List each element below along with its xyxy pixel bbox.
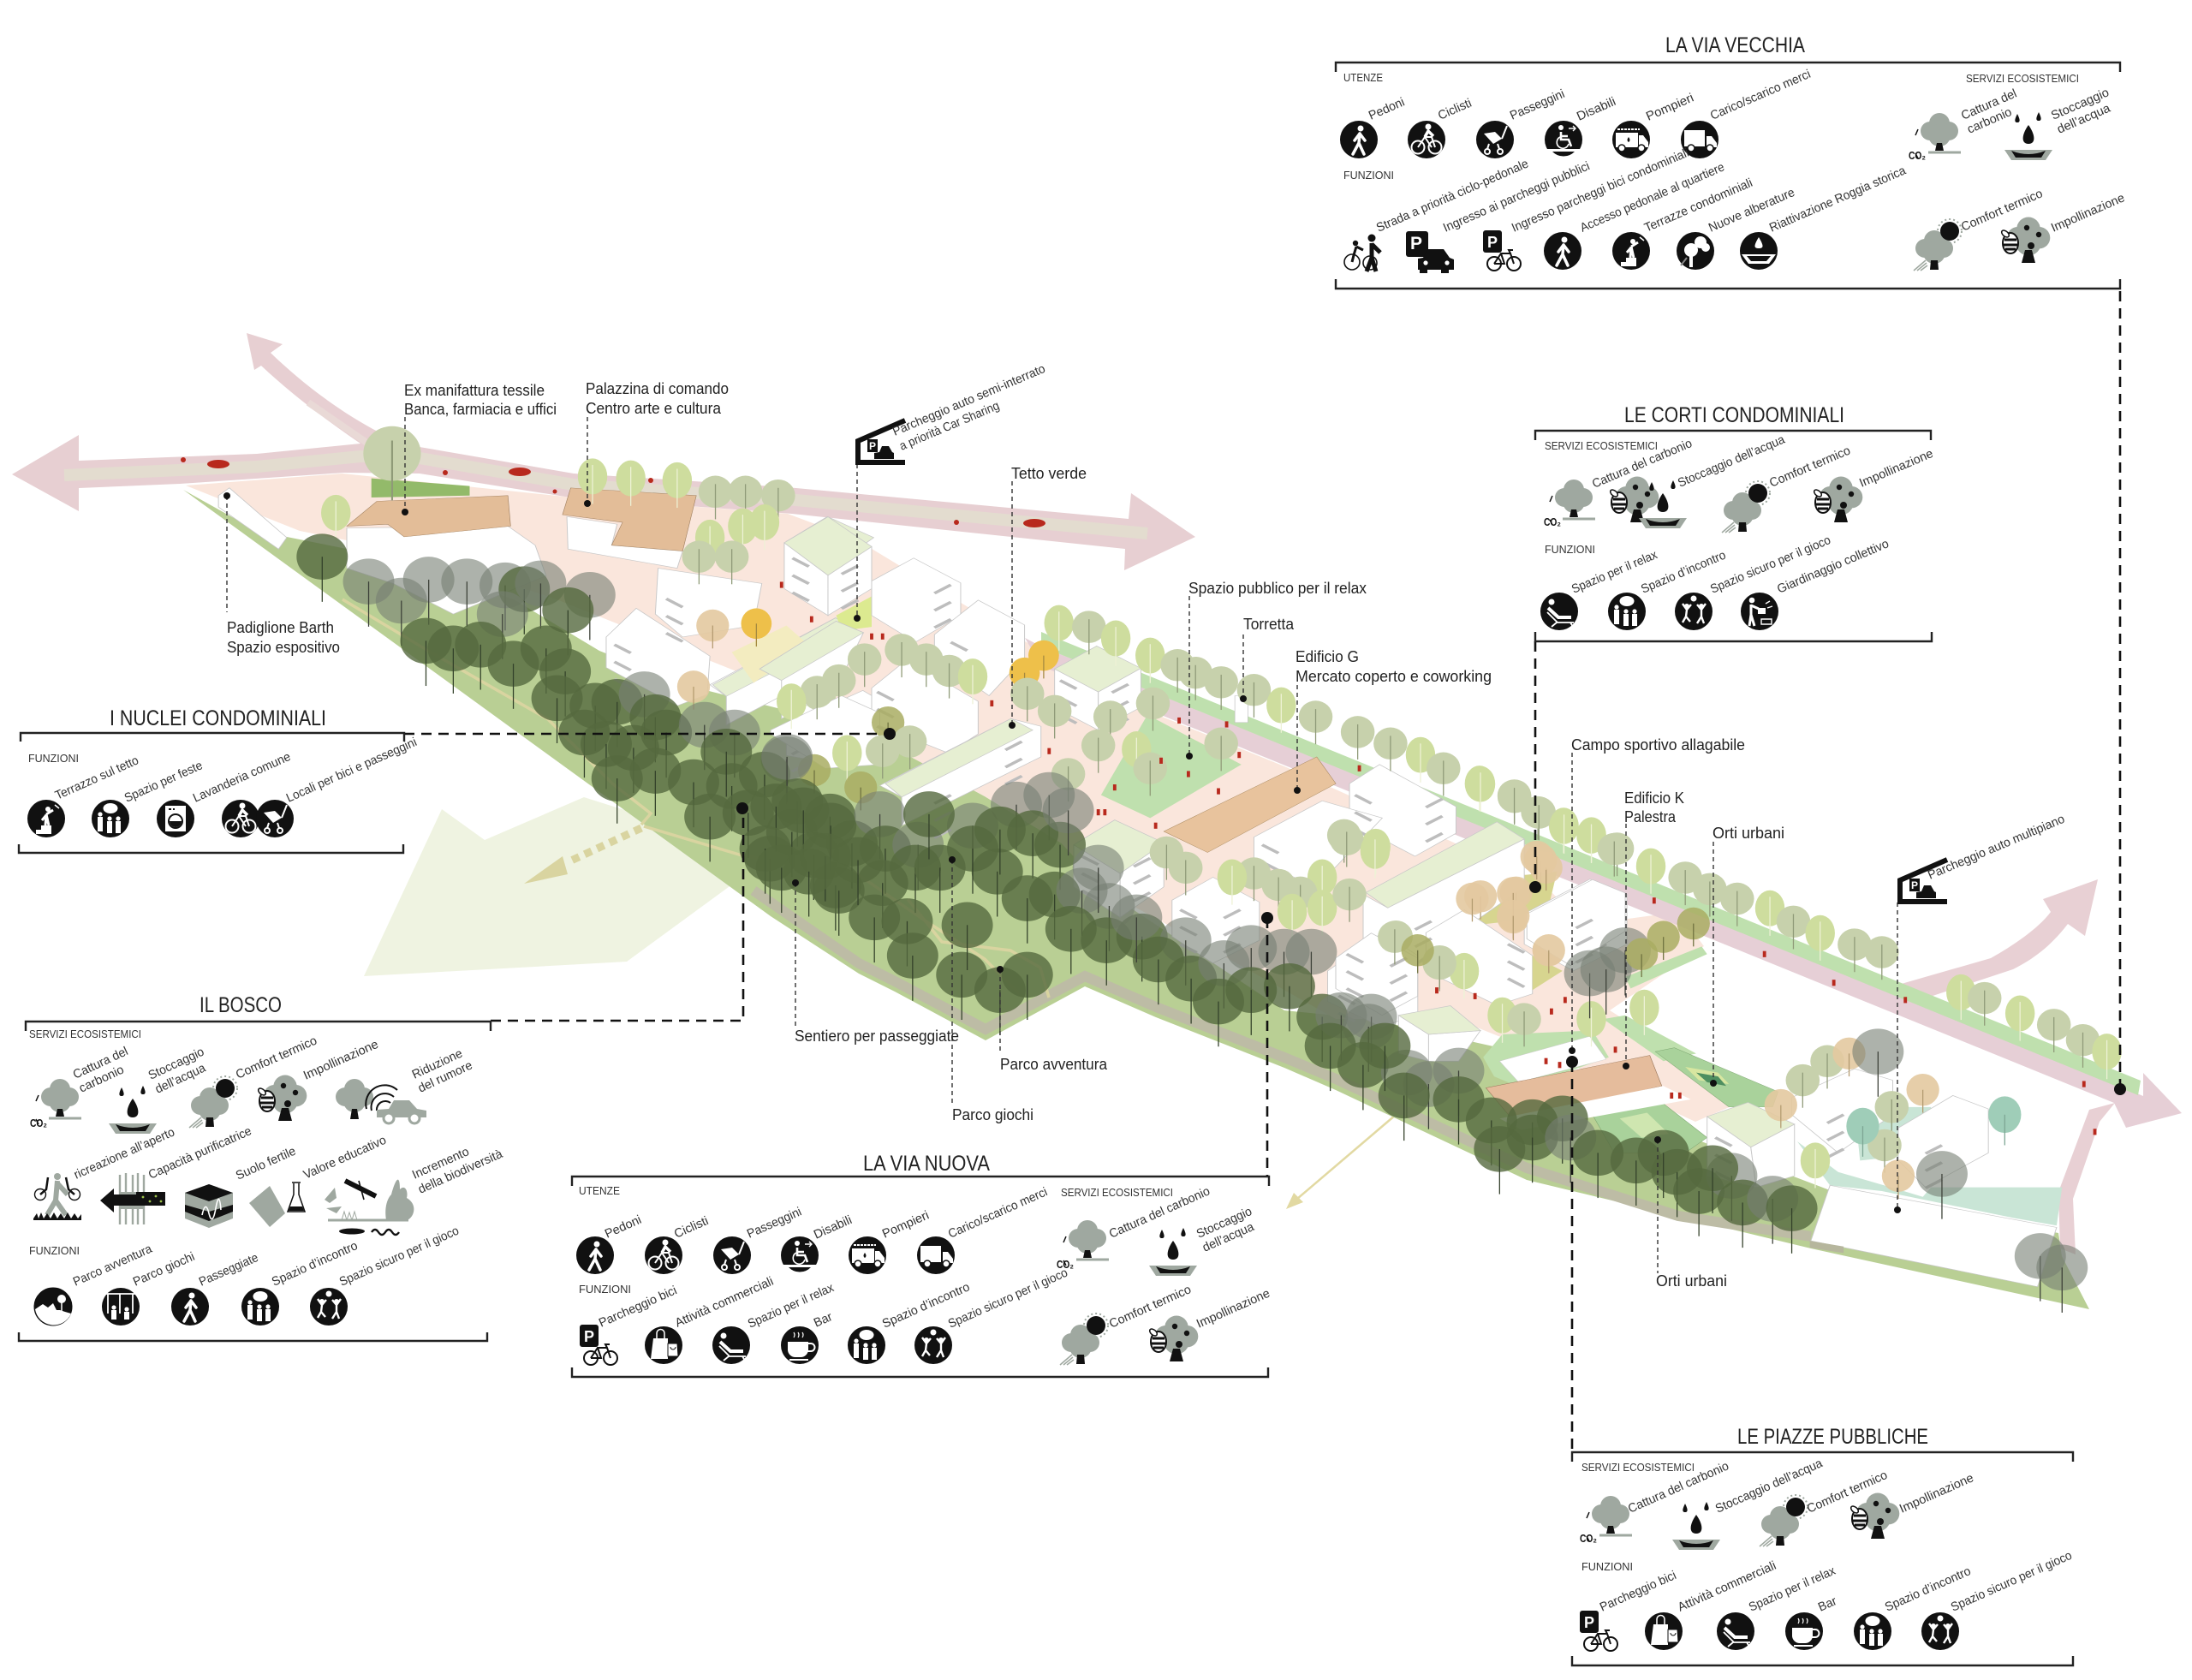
section labels <box>1343 71 2079 182</box>
icon: Attività commerciali <box>645 1275 776 1364</box>
panel: Le piazze pubbliche <box>1572 1425 2074 1665</box>
icon: Comfort termico <box>189 1034 319 1128</box>
icon: Impollinazione <box>2000 191 2127 263</box>
icon: Bar: Bar <box>812 1310 835 1331</box>
icon: Spazio per il relax <box>712 1281 837 1364</box>
icon: Cattura del carbonio: CO₂ <box>1580 1532 1597 1545</box>
icon: Incremento della biodiversità: Incremento <box>410 1145 471 1183</box>
icon: Attività commerciali: Attività commerciali <box>673 1275 776 1331</box>
section labels: UTENZE <box>1343 71 1383 84</box>
panel bracket <box>572 1177 1269 1377</box>
label: Ex manifattura tessile: Banca, farmiacia e uffici <box>404 400 557 418</box>
icon: Cattura del carbonio: Cattura del <box>71 1045 130 1082</box>
heading: I NUCLEI CONDOMINIALI <box>110 706 326 730</box>
icon: Carico/scarico merci <box>1681 68 1813 158</box>
icon: Cattura del carbonio: carbonio <box>77 1063 126 1096</box>
icon: Passeggini <box>1476 87 1567 158</box>
icon: Accesso pedonale: Accesso pedonale al quartiere <box>1578 160 1726 235</box>
icon: Spazio d'incontro <box>1608 549 1728 630</box>
icon: Comfort termico <box>1760 1469 1890 1546</box>
label: Spazio pubblico: Spazio pubblico per il relax <box>1188 579 1367 597</box>
map: axonometric site plan <box>12 333 2182 1313</box>
panel bracket <box>1572 1452 2073 1665</box>
panel bracket <box>1336 63 2120 289</box>
icon: Passeggini: Passeggini <box>1508 87 1567 123</box>
panel: La via vecchia <box>1336 33 2127 289</box>
icon: Strada a priorità <box>1344 157 1531 271</box>
icon: Impollinazione: Impollinazione <box>301 1038 381 1083</box>
label: Torretta: Torretta <box>1243 615 1295 633</box>
forest trees: central grove <box>740 734 1397 1062</box>
section labels: SERVIZI ECOSISTEMICI <box>29 1028 141 1040</box>
icon: parcheggio multipiano <box>1897 813 2067 904</box>
icon: Pedoni <box>1340 95 1407 158</box>
section labels: SERVIZI ECOSISTEMICI <box>1581 1461 1695 1474</box>
icon: Riattivazione Roggia: Riattivazione Roggia storica <box>1767 164 1909 235</box>
icon: Cattura del carbonio: CO₂ <box>30 1117 47 1129</box>
icon: Spazio sicuro per il gioco <box>310 1224 462 1326</box>
icon: Giardinaggio collettivo: Giardinaggio collettivo <box>1775 537 1891 597</box>
icon: Ingresso parcheggi pubblici <box>1406 159 1592 273</box>
icon: Lavanderia comune: Lavanderia comune <box>191 750 293 806</box>
icon: Spazio sicuro per il gioco <box>1921 1549 2074 1650</box>
icon: Ciclisti <box>645 1214 711 1274</box>
icon: Cattura del carbonio <box>1544 437 1695 528</box>
icon: Spazio per il relax <box>1717 1564 1838 1650</box>
icon: Ciclisti <box>1408 97 1474 158</box>
icon: Parcheggio bici <box>580 1284 679 1365</box>
icon: Cattura del carbonio: Cattura del carbonio <box>1590 437 1695 491</box>
road: via vecchia pink arrows <box>12 333 1195 570</box>
section labels: SERVIZI ECOSISTEMICI <box>1966 72 2079 85</box>
icon: Spazio d'incontro <box>1854 1564 1973 1650</box>
icon: Spazio sicuro per il gioco: Spazio sicuro per il gioco <box>1708 533 1833 597</box>
icon: parcheggio semi-interrato: a priorità Car Sharing <box>897 399 1002 454</box>
icon: Disabili <box>781 1213 855 1276</box>
icon: Comfort termico: Comfort termico <box>234 1034 319 1082</box>
icon: Nuove alberature: Nuove alberature <box>1707 186 1797 235</box>
icon: Terrazze condominiali: Terrazze condominiali <box>1642 176 1754 235</box>
icon: Spazio d'incontro: Spazio d’incontro <box>1883 1564 1973 1615</box>
icon: Ciclisti: Ciclisti <box>1436 97 1474 123</box>
icon: Comfort termico: Comfort termico <box>1107 1283 1194 1331</box>
icon: Cattura del carbonio: carbonio <box>1965 105 2014 137</box>
icon: Bar <box>781 1310 835 1364</box>
icon: Pedoni: Pedoni <box>603 1213 644 1242</box>
heading: LE CORTI CONDOMINIALI <box>1624 403 1844 427</box>
icon: Disabili: Disabili <box>812 1213 855 1242</box>
section labels <box>579 1184 1173 1296</box>
icon: Spazio per il relax: Spazio per il relax <box>1747 1564 1838 1615</box>
icon: Comfort termico: Comfort termico <box>1959 187 2045 235</box>
icon: Pompieri: Pompieri <box>1644 91 1696 124</box>
icon: Spazio d'incontro: Spazio d’incontro <box>1639 549 1728 597</box>
icon: Terrazze condominiali <box>1612 176 1754 270</box>
icon: Spazio sicuro per il gioco: Spazio sicuro per il gioco <box>1949 1549 2074 1615</box>
buildings: central sector <box>759 517 1627 1028</box>
section labels <box>1545 439 1658 556</box>
trees: central sector and street row <box>777 605 1634 998</box>
section labels <box>29 1028 141 1257</box>
icon: Riduzione del rumore <box>336 1046 474 1123</box>
icon: Stoccaggio dell'acqua: Stoccaggio <box>2049 86 2112 123</box>
icon: Carico/scarico merci: Carico/scarico merci <box>1708 68 1813 123</box>
cars and cyclists on via vecchia <box>181 457 1045 527</box>
icon: ricreazione all'aperto: ricreazione all’aperto <box>72 1125 177 1183</box>
panel: Il bosco <box>19 993 505 1341</box>
icon: Impollinazione <box>1148 1287 1272 1361</box>
icon: Stoccaggio dell'acqua: Stoccaggio <box>1194 1205 1254 1242</box>
icon: Ingresso parcheggi pubblici: Ingresso ai parcheggi pubblici <box>1441 159 1592 235</box>
icon: Spazio sicuro per il gioco: Spazio sicuro per il gioco <box>946 1266 1070 1331</box>
icon: Spazio per feste <box>92 759 205 837</box>
icon: Cattura del carbonio <box>30 1045 130 1129</box>
icon: Carico/scarico merci <box>917 1185 1050 1274</box>
forest paths <box>342 599 1049 998</box>
icon: Pompieri: Pompieri <box>880 1208 932 1242</box>
icon: Spazio per il relax <box>1540 548 1660 630</box>
icon: Ingresso parcheggi bici: Ingresso parcheggi bici condominiali <box>1510 146 1691 235</box>
trees: east sector and street row <box>1330 766 2122 1219</box>
icon: Giardinaggio collettivo <box>1741 537 1891 630</box>
arrow: pale green flow arrow towards southwest <box>364 797 771 976</box>
icon: parcheggio multipiano: Parcheggio auto multipiano <box>1926 813 2067 883</box>
section labels: FUNZIONI <box>1545 543 1595 556</box>
icon: Bar <box>1785 1594 1839 1650</box>
icon: Stoccaggio dell'acqua: dell’acqua <box>153 1061 209 1097</box>
icon: ricreazione all'aperto <box>33 1125 177 1220</box>
panel bracket <box>1535 431 1932 641</box>
icon: Suolo fertile: Suolo fertile <box>234 1145 298 1183</box>
icon: Stoccaggio dell'acqua <box>1149 1205 1257 1276</box>
icon: Impollinazione <box>1813 447 1935 522</box>
icon: Spazio d'incontro: Spazio d’incontro <box>880 1280 972 1331</box>
icon: Impollinazione: Impollinazione <box>1857 447 1935 491</box>
icon: parcheggio semi-interrato <box>855 362 1047 465</box>
icon: Impollinazione: Impollinazione <box>1194 1287 1272 1331</box>
east sector: courts, gardens, buildings <box>1336 879 2062 1287</box>
section labels: FUNZIONI <box>1581 1560 1633 1573</box>
icon: Riattivazione Roggia <box>1740 164 1909 270</box>
forest trees: western grove <box>296 533 878 931</box>
icon: Parco avventura <box>34 1242 155 1326</box>
section labels: SERVIZI ECOSISTEMICI <box>1545 439 1658 452</box>
buildings: west sector <box>218 479 896 771</box>
icon: Stoccaggio dell'acqua: Stoccaggio dell’acqua <box>1676 432 1788 491</box>
icon: Terrazzo sul tetto: Terrazzo sul tetto <box>53 754 141 803</box>
icon: Ciclisti: Ciclisti <box>672 1214 711 1242</box>
icon: Pompieri <box>1612 91 1696 158</box>
panel bracket <box>19 1022 491 1341</box>
icon: Spazio per feste: Spazio per feste <box>122 759 205 806</box>
label: Ex manifattura tessile: Ex manifattura tessile <box>404 381 545 399</box>
icon: Cattura del carbonio: Cattura del carbonio <box>1626 1459 1731 1516</box>
section labels: FUNZIONI <box>29 1244 80 1257</box>
ground: pink plazas <box>186 474 1755 1122</box>
heading: LA VIA NUOVA <box>863 1152 990 1176</box>
icon: Parcheggio bici: Parcheggio bici <box>1598 1569 1678 1615</box>
icon: Ingresso parcheggi bici <box>1483 146 1691 271</box>
icon: Capacità purificatrice <box>100 1124 253 1224</box>
label: Orti urbani north: Orti urbani <box>1712 824 1784 842</box>
label: Parco giochi: Parco giochi <box>952 1105 1033 1123</box>
light trees: west sector <box>321 426 836 730</box>
icon: Comfort termico <box>1914 187 2045 271</box>
icon: Cattura del carbonio: Cattura del <box>1959 86 2019 123</box>
icon: Spazio per il relax: Spazio per il relax <box>746 1281 837 1331</box>
icon: Capacità purificatrice: Capacità purificatrice <box>146 1124 253 1183</box>
icon: Passeggini <box>713 1205 804 1274</box>
label: Edificio G: Mercato coperto e coworking <box>1296 667 1492 685</box>
icon: Nuove alberature <box>1677 186 1797 270</box>
icon: Comfort termico: Comfort termico <box>1767 444 1853 491</box>
icon: Impollinazione: Impollinazione <box>1897 1471 1976 1516</box>
label: Sentiero: Sentiero per passeggiate <box>795 1027 959 1045</box>
icon: Disabili <box>1545 95 1618 160</box>
icon: Stoccaggio dell'acqua: dell’acqua <box>2055 101 2113 137</box>
icon: Impollinazione <box>257 1038 381 1121</box>
label: Padiglione Barth: Spazio espositivo <box>227 638 340 656</box>
icon: Valore educativo: Valore educativo <box>301 1134 389 1183</box>
section label: FUNZIONI <box>28 752 79 765</box>
section labels: FUNZIONI <box>579 1283 631 1296</box>
callouts: thin leader lines and dots <box>223 417 1901 1273</box>
icon: Suolo fertile <box>185 1145 298 1228</box>
icon: Passeggiate: Passeggiate <box>197 1251 260 1290</box>
icon: Comfort termico <box>1060 1283 1194 1365</box>
icon: Stoccaggio dell'acqua <box>109 1046 209 1134</box>
icon: Terrazzo sul tetto <box>27 754 141 837</box>
icon: Spazio d'incontro <box>241 1239 360 1326</box>
people in red <box>780 581 1361 829</box>
map labels <box>227 362 2067 1290</box>
forest edge track <box>754 891 1811 1236</box>
icon: Impollinazione <box>1850 1471 1976 1539</box>
section labels: FUNZIONI <box>1343 169 1394 182</box>
icon: Cattura del carbonio: CO₂ <box>1057 1258 1074 1271</box>
section labels: UTENZE <box>579 1184 620 1197</box>
icon: Riduzione del rumore: Riduzione <box>410 1046 465 1082</box>
label: Palazzina di comando: Centro arte e cultura <box>586 399 722 417</box>
section labels <box>1581 1461 1695 1573</box>
icon: Attività commerciali: Attività commerciali <box>1676 1559 1778 1615</box>
icon: Parco giochi <box>102 1250 197 1326</box>
road: via nuova pink road and arrows <box>1025 638 2182 1254</box>
icon: Valore educativo <box>249 1134 389 1227</box>
icon: Stoccaggio dell'acqua: Stoccaggio <box>146 1046 206 1083</box>
section labels: SERVIZI ECOSISTEMICI <box>1061 1186 1173 1199</box>
label: Edificio G: Edificio G <box>1296 647 1359 665</box>
icon: Stoccaggio dell'acqua <box>2004 86 2113 160</box>
icon: Parco avventura: Parco avventura <box>71 1242 155 1290</box>
label: Parco avventura: Parco avventura <box>1000 1055 1108 1073</box>
icon: Passeggiate <box>171 1251 260 1326</box>
panel: La via nuova <box>572 1152 1272 1377</box>
icon: Parcheggio bici: Parcheggio bici <box>597 1284 679 1331</box>
icon: Cattura del carbonio: CO₂ <box>1909 149 1926 162</box>
icon: Comfort termico <box>1722 444 1853 533</box>
icon: Carico/scarico merci: Carico/scarico merci <box>946 1185 1050 1242</box>
icon: parcheggio semi-interrato: Parcheggio auto semi-interrato <box>890 362 1047 439</box>
icon: Cattura del carbonio <box>1580 1459 1731 1545</box>
icon: Disabili: Disabili <box>1575 95 1618 124</box>
icon: Parcheggio bici <box>1580 1569 1678 1651</box>
icon: Pedoni <box>576 1213 644 1274</box>
icon: Attività commerciali <box>1645 1559 1778 1650</box>
icon: Lavanderia comune <box>157 750 293 837</box>
icon: Parco giochi: Parco giochi <box>131 1250 197 1290</box>
icon: Stoccaggio dell'acqua: dell’acqua <box>1200 1220 1257 1255</box>
icon: Cattura del carbonio <box>1909 86 2019 162</box>
label: Edificio K: Edificio K <box>1624 789 1685 807</box>
icon: Spazio sicuro per il gioco <box>914 1266 1070 1364</box>
icon: Accesso pedonale <box>1544 160 1726 270</box>
icon: Pompieri <box>849 1208 932 1274</box>
panel bracket <box>19 733 404 853</box>
heading: LA VIA VECCHIA <box>1665 33 1805 57</box>
heading: LE PIAZZE PUBBLICHE <box>1737 1425 1928 1449</box>
callouts: bold panel connectors and dots <box>404 291 2126 1452</box>
icon: Spazio sicuro per il gioco: Spazio sicuro per il gioco <box>337 1224 462 1290</box>
label: Campo sportivo: Campo sportivo allagabile <box>1571 736 1745 754</box>
icon: Locali per bici e passeggini <box>222 736 419 837</box>
icon: Stoccaggio dell'acqua: Stoccaggio dell’acqua <box>1713 1457 1826 1516</box>
icon: Cattura del carbonio: Cattura del carbonio <box>1107 1184 1212 1242</box>
forest trees: eastern grove <box>1305 908 2088 1313</box>
icon: Spazio sicuro per il gioco <box>1675 533 1833 630</box>
icon: Spazio d'incontro: Spazio d’incontro <box>270 1239 360 1290</box>
arrow: thin tan pedestrian link <box>1286 1115 1396 1209</box>
label: Edificio K: Palestra <box>1624 807 1677 825</box>
icon: Bar: Bar <box>1816 1594 1839 1615</box>
icon: Stoccaggio dell'acqua <box>1672 1457 1826 1550</box>
label: Orti urbani south: Orti urbani <box>1656 1272 1727 1290</box>
icon: Incremento della biodiversità: della biodiversità <box>416 1147 505 1197</box>
icon: Cattura del carbonio <box>1057 1184 1212 1271</box>
icon: Passeggini: Passeggini <box>745 1205 804 1242</box>
label: Palazzina di comando: Palazzina di comando <box>586 379 729 397</box>
icon: Spazio per il relax: Spazio per il relax <box>1570 548 1660 597</box>
label: Tetto verde: Tetto verde <box>1011 464 1087 482</box>
label: Padiglione Barth: Padiglione Barth <box>227 618 334 636</box>
icon: Comfort termico: Comfort termico <box>1805 1469 1890 1516</box>
heading: IL BOSCO <box>200 993 282 1017</box>
icon: Riduzione del rumore: del rumore <box>416 1058 474 1096</box>
green strip along via nuova <box>1041 632 2141 1095</box>
icon: Spazio d'incontro <box>848 1280 972 1364</box>
icon: Strada a priorità: Strada a priorità ciclo-pedonale <box>1374 157 1531 235</box>
icon: Cattura del carbonio: CO₂ <box>1544 515 1561 528</box>
panel: I nuclei condominiali <box>19 706 419 853</box>
ground: forest band <box>183 490 2089 1309</box>
arrow: dashed tan path arrow <box>524 828 641 884</box>
icon: Locali per bici e passeggini: Locali per bici e passeggini <box>284 736 419 806</box>
icon: Impollinazione: Impollinazione <box>2049 191 2127 235</box>
icon: Incremento della biodiversità <box>325 1145 505 1235</box>
icon: Pedoni: Pedoni <box>1367 95 1407 123</box>
icon: Stoccaggio dell'acqua <box>1609 432 1788 528</box>
panel: Le corti condominiali <box>1535 403 1935 641</box>
